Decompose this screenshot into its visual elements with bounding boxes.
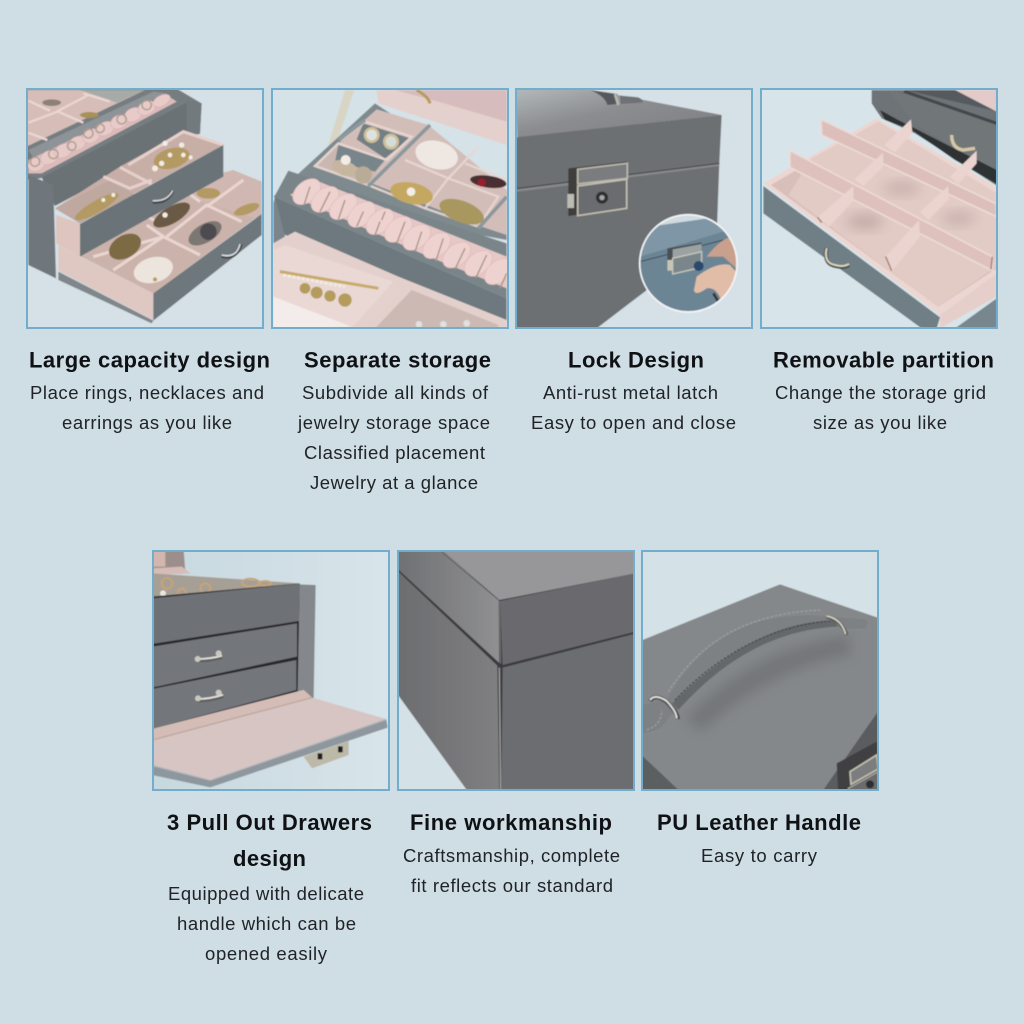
- description: Easy to carry: [701, 845, 818, 866]
- drawer fronts: [152, 584, 300, 644]
- handles: [197, 657, 222, 660]
- middle drawer: [56, 133, 222, 208]
- dark base behind drawers: [152, 583, 300, 730]
- photo: open drawers with jewelry: [28, 90, 262, 324]
- inset: hand turning key: [637, 213, 743, 313]
- heading: 3 Pull Out Drawers: [167, 810, 372, 835]
- heading: Separate storage: [304, 348, 491, 372]
- description: Classified placement: [304, 442, 485, 463]
- photo: closed drawers with flap down: [154, 552, 388, 789]
- cross dividers: [884, 119, 912, 153]
- frame: [761, 89, 997, 328]
- heading: Large capacity design: [29, 348, 270, 372]
- description: Easy to open and close: [531, 412, 736, 433]
- frame: [516, 89, 752, 328]
- heading: Fine workmanship: [410, 810, 612, 835]
- panel: fine workmanship: [392, 545, 645, 896]
- description: Anti-rust metal latch: [543, 382, 718, 403]
- description: fit reflects our standard: [411, 875, 613, 896]
- handle strap: [590, 90, 617, 105]
- description: handle which can be: [177, 913, 356, 934]
- photo: box front with metal latch: [517, 90, 738, 327]
- floor shadows: [847, 213, 883, 230]
- frame: [27, 89, 263, 328]
- ring rolls channel: [274, 171, 507, 298]
- description: size as you like: [813, 412, 947, 433]
- frame: [398, 551, 634, 790]
- jewelry: [364, 127, 399, 150]
- front of top tray: [42, 103, 187, 206]
- open lid: [152, 690, 386, 780]
- panel: 3 pull out drawers: [147, 545, 400, 964]
- panel: PU leather handle: [635, 545, 888, 866]
- panel: separate storage: [265, 80, 518, 493]
- dark base behind faces: [397, 550, 635, 793]
- photo: stitched leather handle: [643, 584, 877, 789]
- description: jewelry storage space: [297, 412, 490, 433]
- metal loops: [650, 697, 678, 719]
- frame: [642, 551, 878, 790]
- description: [168, 883, 364, 964]
- front band: [274, 197, 507, 322]
- box behind: [872, 90, 998, 187]
- photo: box corner close-up: [399, 552, 633, 789]
- panel: large capacity design: [20, 80, 273, 433]
- photo: drawer with removable dividers: [763, 90, 996, 327]
- tray body: [273, 103, 507, 240]
- description: earrings as you like: [62, 412, 232, 433]
- description: Place rings, necklaces and: [30, 382, 264, 403]
- description: Jewelry at a glance: [310, 472, 478, 493]
- heading: design: [233, 846, 306, 871]
- long dividers: [821, 119, 997, 217]
- photo: compartments and ring rolls: [273, 90, 507, 327]
- handle: [826, 248, 849, 267]
- jewelry: pearls and gold: [72, 144, 261, 265]
- latch glimpse: [837, 742, 880, 793]
- handles: [153, 191, 173, 202]
- heading: PU Leather Handle: [657, 810, 861, 835]
- description: [403, 845, 620, 896]
- metal clasp: [304, 741, 349, 768]
- description: opened easily: [205, 943, 328, 964]
- description: [297, 382, 490, 493]
- side panel: [295, 584, 316, 699]
- panel: lock design: [510, 80, 763, 433]
- latch: [567, 162, 627, 216]
- heading: [167, 810, 372, 871]
- description: [775, 382, 986, 433]
- handle strap: [640, 615, 868, 734]
- description: Change the storage grid: [775, 382, 986, 403]
- heading: Lock Design: [568, 348, 704, 372]
- drawer front: [763, 186, 940, 328]
- description: [30, 382, 264, 433]
- heading: Removable partition: [773, 348, 994, 372]
- panel: removable partition: [755, 80, 1008, 433]
- description: Subdivide all kinds of: [302, 382, 489, 403]
- lower drawer: [59, 197, 256, 294]
- description: [531, 382, 736, 433]
- description: Craftsmanship, complete: [403, 845, 620, 866]
- description: Equipped with delicate: [168, 883, 364, 904]
- lower drawer: [273, 232, 507, 330]
- frame: [153, 551, 389, 790]
- frame: [272, 89, 508, 328]
